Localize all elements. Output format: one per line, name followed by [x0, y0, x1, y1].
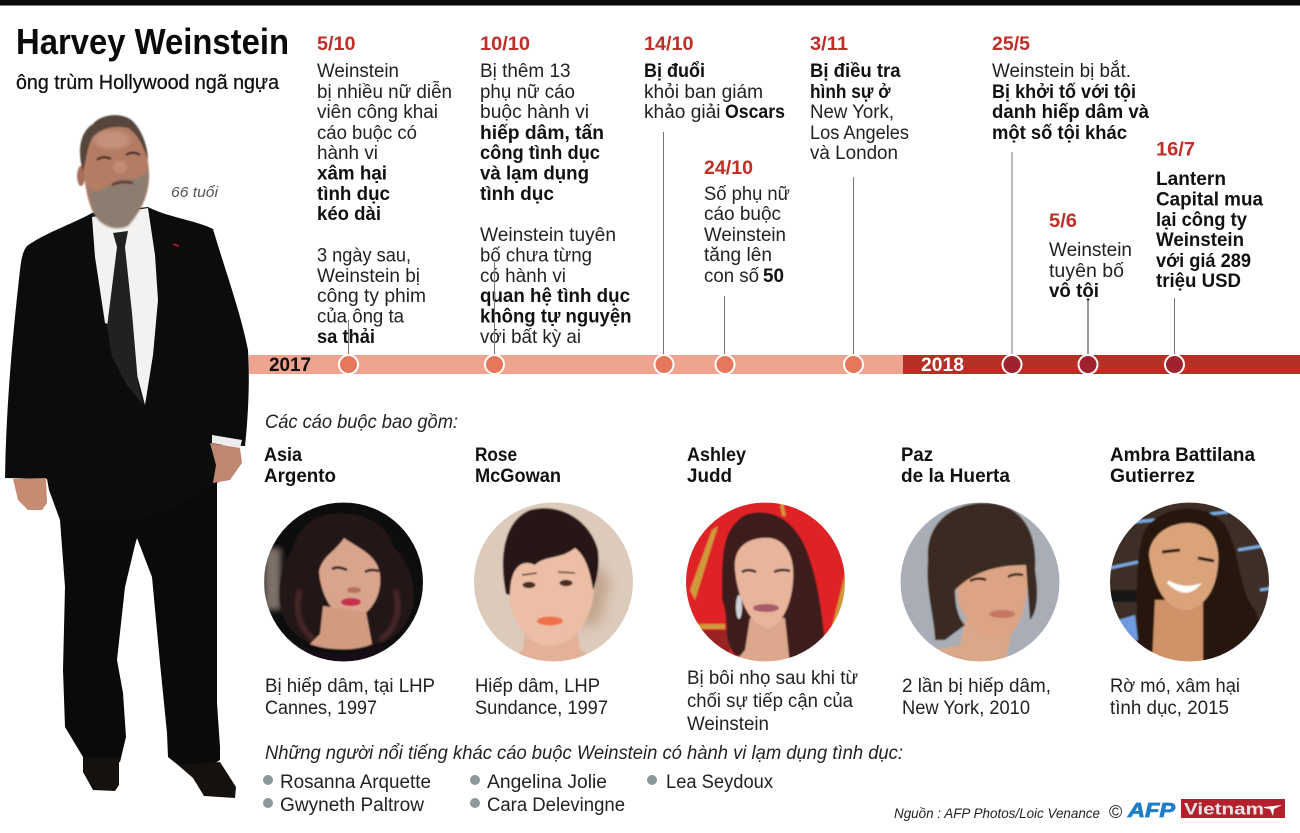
event 24/10: Số phụ nữ — [704, 184, 790, 205]
timeline markers — [339, 355, 1184, 374]
event 5/10: của ông ta — [317, 306, 404, 328]
event 5/6: tuyên bố — [1049, 261, 1124, 282]
name: Asia Argento: Asia — [264, 445, 302, 466]
event 25/5: Bị khởi tố với tội — [992, 82, 1136, 103]
source credit: Nguồn : AFP Photos/Loic Venance — [894, 805, 1100, 821]
event 25/5: Weinstein bị bắt. — [992, 60, 1131, 82]
event 5/10: Weinstein bị — [317, 266, 420, 287]
event 10/10: quan hệ tình dục — [480, 286, 630, 307]
event 10/10: có hành vi — [480, 266, 566, 287]
event 10/10: tình dục — [480, 184, 554, 205]
section heading: accusers: Các cáo buộc bao gồm: — [265, 412, 458, 433]
caption: Paz de la Huerta: 2 lần bị hiếp dâm, — [902, 676, 1051, 697]
caption: Ambra Battilana Gutierrez: Rờ mó, xâm hại — [1110, 676, 1240, 697]
photo: Ambra Battilana Gutierrez — [1108, 502, 1272, 664]
name: Ashley Judd: Judd — [687, 466, 732, 487]
name: Rose McGowan — [475, 445, 561, 487]
event 10/10: Bị thêm 13 — [480, 61, 570, 82]
logo: copyright AFP — [1109, 800, 1176, 822]
list of other celebrities: Rosanna Arquette — [280, 772, 431, 793]
event 5/10: xâm hại — [317, 164, 387, 184]
name: Ambra Battilana Gutierrez: Ambra Battilana — [1110, 445, 1255, 466]
event 16/7: Lantern — [1156, 169, 1226, 190]
event 16/7: triệu USD — [1156, 271, 1241, 292]
age label: 66 tuổi — [171, 184, 219, 201]
shirt — [92, 208, 158, 405]
name: Paz de la Huerta: Paz — [901, 445, 933, 466]
event 14/10: khỏi ban giám — [644, 82, 763, 103]
top black rule — [0, 0, 1300, 6]
timeline leader lines — [348, 132, 1174, 356]
caption: Ashley Judd: chối sự tiếp cận của — [687, 691, 853, 712]
year 2018: 2018 — [921, 355, 964, 376]
caption: Rose McGowan: Hiếp dâm, LHP — [475, 676, 600, 697]
event 5/10: sa thải — [317, 327, 375, 348]
hair — [80, 115, 148, 172]
event 5/10: tình dục — [317, 184, 390, 205]
list of other celebrities: Cara Delevingne — [487, 795, 625, 816]
event 10/10: và lạm dụng — [480, 164, 589, 184]
event 5/10: kéo dài — [317, 204, 381, 225]
event 16/7: với giá 289 — [1156, 251, 1251, 272]
caption: Ashley Judd: Weinstein — [687, 714, 769, 735]
event 16/7: 16/7 — [1156, 140, 1195, 160]
logo: Vietnam+ — [1181, 799, 1285, 818]
event 3/11: hình sự ở — [810, 82, 891, 103]
photo: Asia Argento — [264, 502, 424, 664]
hands — [13, 478, 47, 510]
head — [77, 115, 149, 228]
list of other celebrities — [263, 772, 773, 816]
shoes — [83, 757, 119, 791]
event 3/11 — [810, 34, 909, 164]
event 10/10: 10/10 — [480, 34, 530, 55]
event 10/10 — [480, 34, 632, 348]
event 16/7 — [1156, 140, 1263, 292]
event 25/5: một số tội khác — [992, 123, 1127, 144]
title: Harvey Weinstein — [16, 21, 289, 62]
event 10/10: công tình dục — [480, 143, 600, 164]
event 3/11: Bị điều tra — [810, 61, 901, 82]
name: Asia Argento — [264, 445, 336, 487]
caption: Paz de la Huerta: New York, 2010 — [902, 698, 1030, 719]
event 10/10: với bất kỳ ai — [480, 327, 581, 348]
caption: Ambra Battilana Gutierrez: tình dục, 2015 — [1110, 698, 1229, 719]
event 14/10: Oscars — [725, 102, 785, 123]
photo: Paz de la Huerta — [900, 502, 1060, 665]
event 25/5: danh hiếp dâm và — [992, 102, 1149, 123]
caption: Ashley Judd: Bị bôi nhọ sau khi từ — [687, 668, 858, 689]
caption: Asia Argento: Bị hiếp dâm, tại LHP — [265, 676, 435, 697]
name: Ashley Judd — [687, 445, 746, 487]
event 24/10 — [704, 158, 790, 287]
event 5/6: Weinstein — [1049, 240, 1132, 261]
caption: Asia Argento — [265, 676, 435, 719]
event 10/10: không tự nguyện — [480, 306, 632, 328]
event 5/6 — [1049, 211, 1132, 302]
logo: copyright AFP: © — [1109, 802, 1122, 822]
event 24/10: 24/10 — [704, 158, 753, 179]
event 14/10 — [644, 34, 785, 123]
cuff — [212, 435, 242, 448]
pocket pin — [173, 244, 179, 246]
ear — [77, 166, 85, 186]
timeline bar — [249, 355, 1300, 376]
portrait: Harvey Weinstein full figure — [5, 115, 249, 798]
heading: other celebrities: Những người nổi tiếng khác cáo buộc Weinstein có hành vi lạm dụng tình dục: — [265, 743, 903, 764]
list of other celebrities: Lea Seydoux — [666, 772, 773, 793]
caption: Rose McGowan: Sundance, 1997 — [475, 698, 608, 719]
name: Rose McGowan: McGowan — [475, 466, 561, 487]
event 25/5 — [992, 34, 1149, 144]
name: Ambra Battilana Gutierrez — [1110, 445, 1255, 487]
photo: Ashley Judd — [685, 502, 847, 665]
list of other celebrities: Angelina Jolie — [487, 772, 607, 793]
event 3/11: New York, — [810, 102, 894, 123]
event 16/7: lại công ty — [1156, 210, 1247, 231]
beard — [87, 170, 148, 228]
event 10/10: bố chưa từng — [480, 246, 592, 266]
event 5/10: 3 ngày sau, — [317, 246, 411, 266]
subtitle: ông trùm Hollywood ngã ngựa — [16, 72, 280, 94]
event 10/10: buộc hành vi — [480, 102, 589, 123]
event 5/10: công ty phim — [317, 286, 426, 307]
eyes, nose, mouth — [97, 153, 140, 160]
face — [83, 117, 149, 226]
caption: Rose McGowan — [475, 676, 608, 719]
event 24/10: 50 — [763, 266, 784, 287]
logo: copyright AFP: AFP — [1127, 800, 1176, 822]
logo: Vietnam+: Vietnam — [1184, 800, 1264, 818]
event 16/7: Capital mua — [1156, 190, 1263, 210]
name: Paz de la Huerta: de la Huerta — [901, 466, 1010, 487]
event 25/5: 25/5 — [992, 34, 1030, 55]
event 24/10: cáo buộc — [704, 204, 781, 225]
event 5/10: bị nhiều nữ diễn — [317, 81, 452, 103]
tie — [107, 231, 143, 405]
name: Paz de la Huerta — [901, 445, 1010, 487]
event 10/10: Weinstein tuyên — [480, 225, 616, 246]
event 24/10: Weinstein — [704, 225, 786, 246]
event 14/10: khảo giải — [644, 102, 720, 123]
forehead highlight — [94, 131, 130, 149]
list of other celebrities: Gwyneth Paltrow — [280, 795, 424, 816]
caption: Paz de la Huerta — [902, 676, 1051, 719]
jacket — [5, 207, 249, 522]
trousers — [50, 470, 220, 777]
event 5/6: 5/6 — [1049, 211, 1077, 232]
photo: Rose McGowan — [473, 502, 635, 662]
caption: Asia Argento: Cannes, 1997 — [265, 698, 377, 719]
event 5/10: viên công khai — [317, 102, 438, 123]
name: Ambra Battilana Gutierrez: Gutierrez — [1110, 466, 1195, 487]
event 14/10: 14/10 — [644, 34, 694, 55]
caption: Ashley Judd — [687, 668, 858, 735]
event 5/6: vô tội — [1049, 281, 1099, 302]
year 2017: 2017 — [269, 355, 311, 376]
event 3/11: và London — [810, 143, 898, 164]
event 5/10: 5/10 — [317, 34, 356, 55]
event 3/11: Los Angeles — [810, 123, 909, 144]
name: Asia Argento: Argento — [264, 466, 336, 487]
event 5/10 — [317, 34, 452, 348]
event 24/10: con số — [704, 266, 759, 287]
event 24/10: tăng lên — [704, 245, 772, 266]
event 10/10: phụ nữ cáo — [480, 82, 575, 103]
event 5/10: Weinstein — [317, 61, 399, 82]
name: Rose McGowan: Rose — [475, 445, 517, 466]
name: Ashley Judd: Ashley — [687, 445, 746, 466]
event 3/11: 3/11 — [810, 34, 848, 55]
event 5/10: cáo buộc có — [317, 123, 417, 144]
caption: Ambra Battilana Gutierrez — [1110, 676, 1240, 719]
event 16/7: Weinstein — [1156, 230, 1244, 251]
event 5/10: hành vi — [317, 143, 378, 164]
event 14/10: Bị đuổi — [644, 61, 705, 82]
event 10/10: hiếp dâm, tấn — [480, 123, 604, 144]
